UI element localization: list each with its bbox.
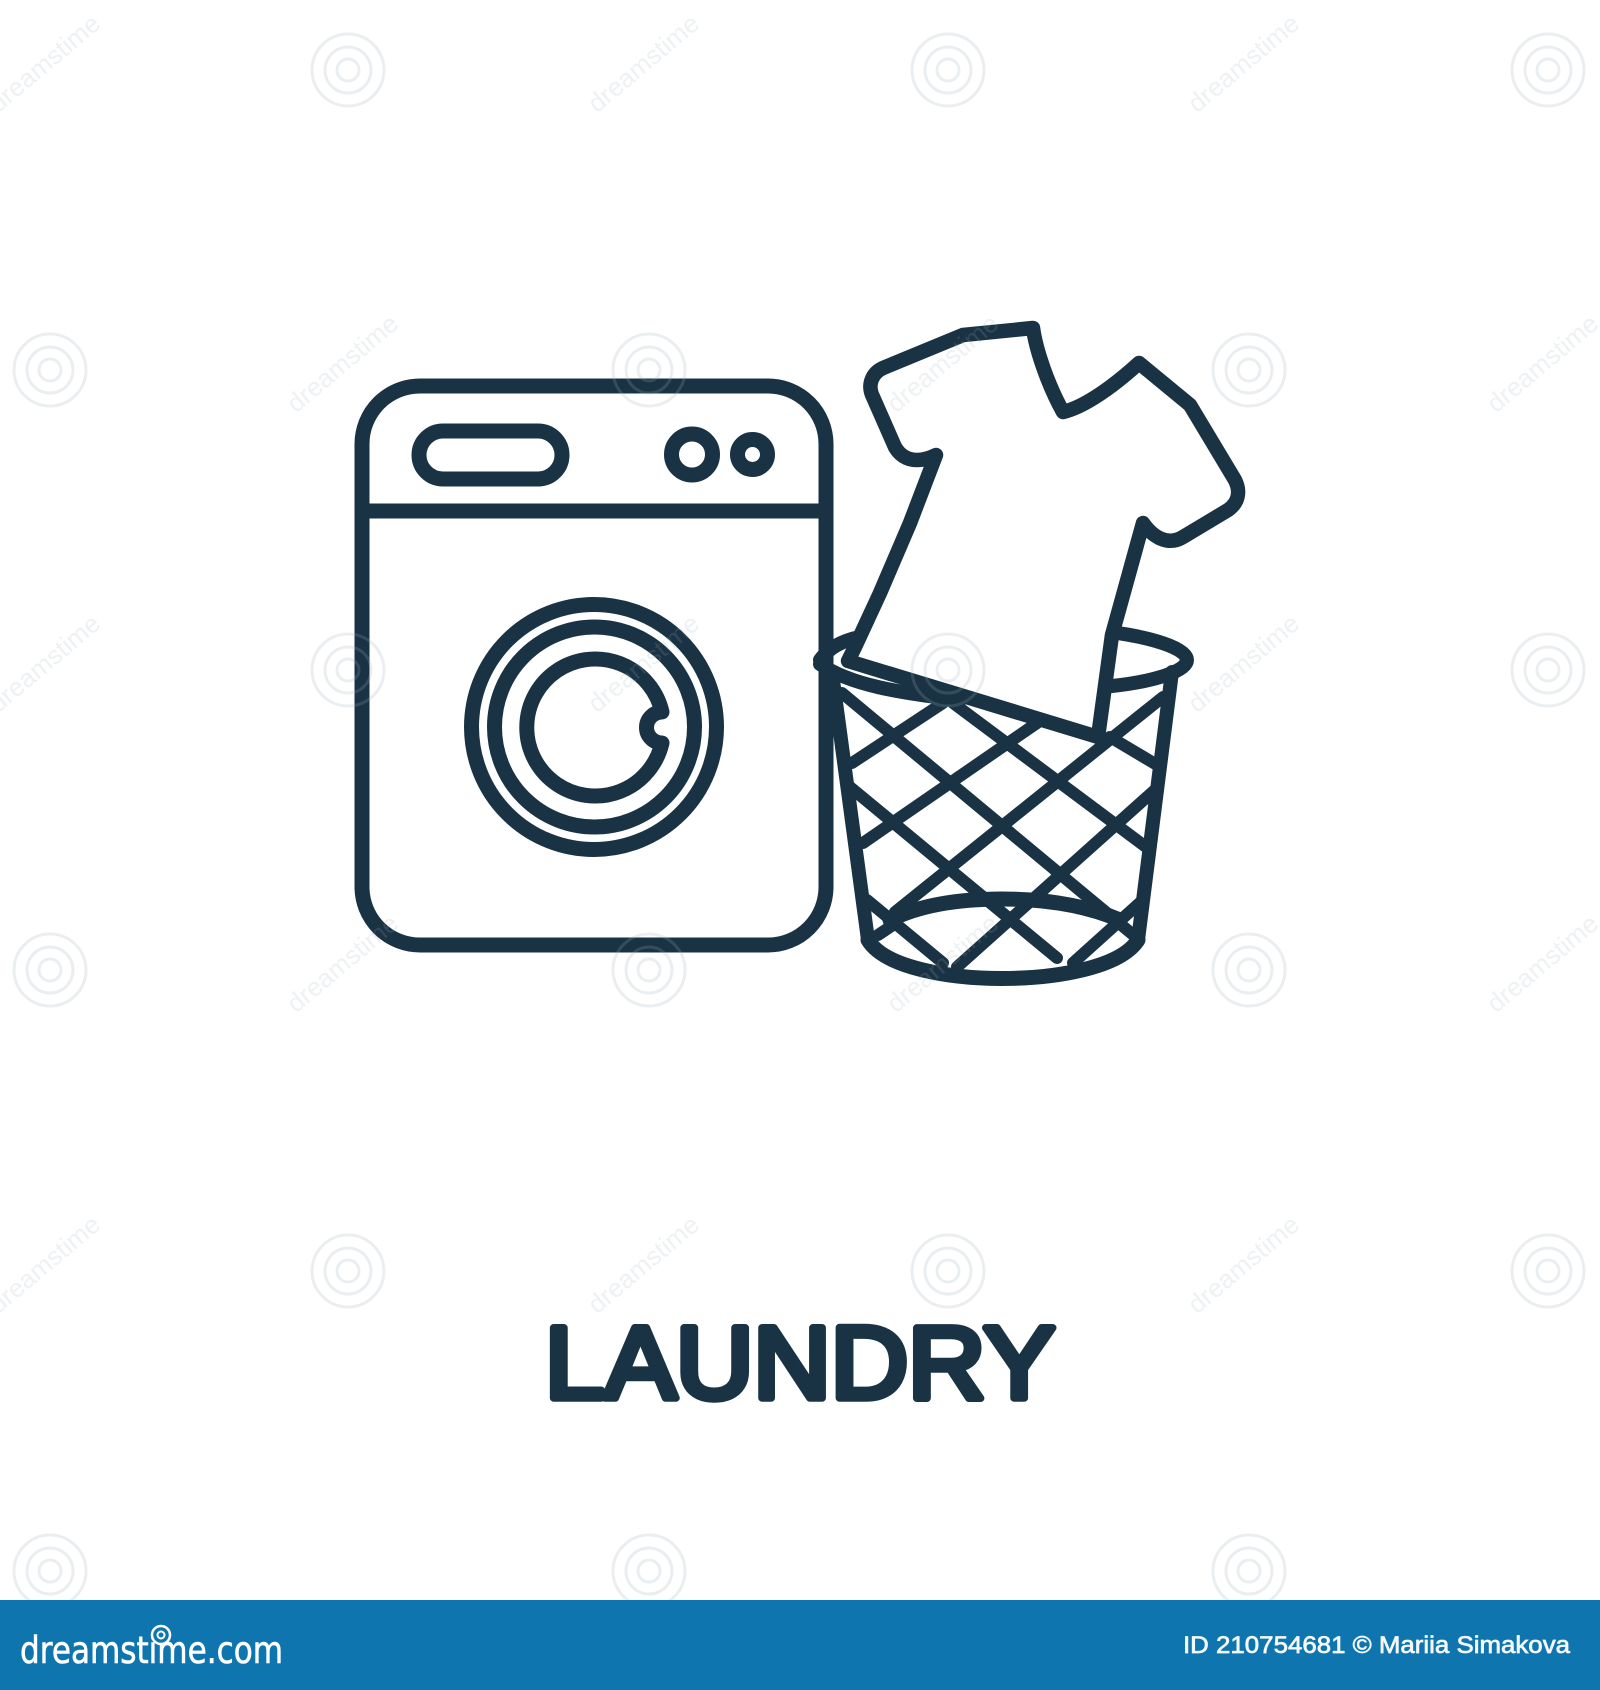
infographic canvas: dreamstime	[582, 1209, 705, 1319]
small knob	[738, 440, 768, 470]
t-shirt	[848, 328, 1238, 737]
basket rim left	[820, 637, 960, 700]
infographic canvas: dreamstime	[1182, 608, 1305, 718]
image id and credit: ID 210754681 © Mariia Simakova	[1183, 1632, 1571, 1659]
washer body	[362, 386, 826, 945]
detergent drawer	[419, 431, 562, 479]
icon: washing machine	[362, 386, 826, 945]
infographic canvas: dreamstime	[1182, 8, 1305, 118]
icon: laundry basket with shirt	[820, 328, 1238, 978]
basket base	[868, 940, 1138, 978]
outer door ring	[472, 604, 716, 850]
inner door ring	[494, 627, 694, 827]
infographic canvas: dreamstime	[582, 608, 705, 718]
title: LAUNDRY	[545, 1306, 1055, 1420]
infographic canvas: dreamstime	[1182, 1209, 1305, 1319]
basket rim right	[1110, 632, 1187, 686]
infographic canvas: dreamstime	[281, 908, 404, 1018]
infographic canvas: dreamstime	[281, 308, 404, 418]
infographic canvas: dreamstime	[881, 908, 1004, 1018]
drum window with notch	[527, 659, 662, 796]
large knob	[672, 434, 712, 475]
footer band	[0, 1600, 1600, 1690]
basket sides	[833, 672, 1172, 940]
control panel divider	[362, 504, 826, 518]
infographic canvas: dreamstime	[582, 8, 705, 118]
infographic canvas: dreamstime	[881, 308, 1004, 418]
footer logo: dreamstime.com	[20, 1629, 283, 1672]
basket lattice	[842, 693, 1163, 967]
basket back base arc	[890, 899, 1120, 920]
